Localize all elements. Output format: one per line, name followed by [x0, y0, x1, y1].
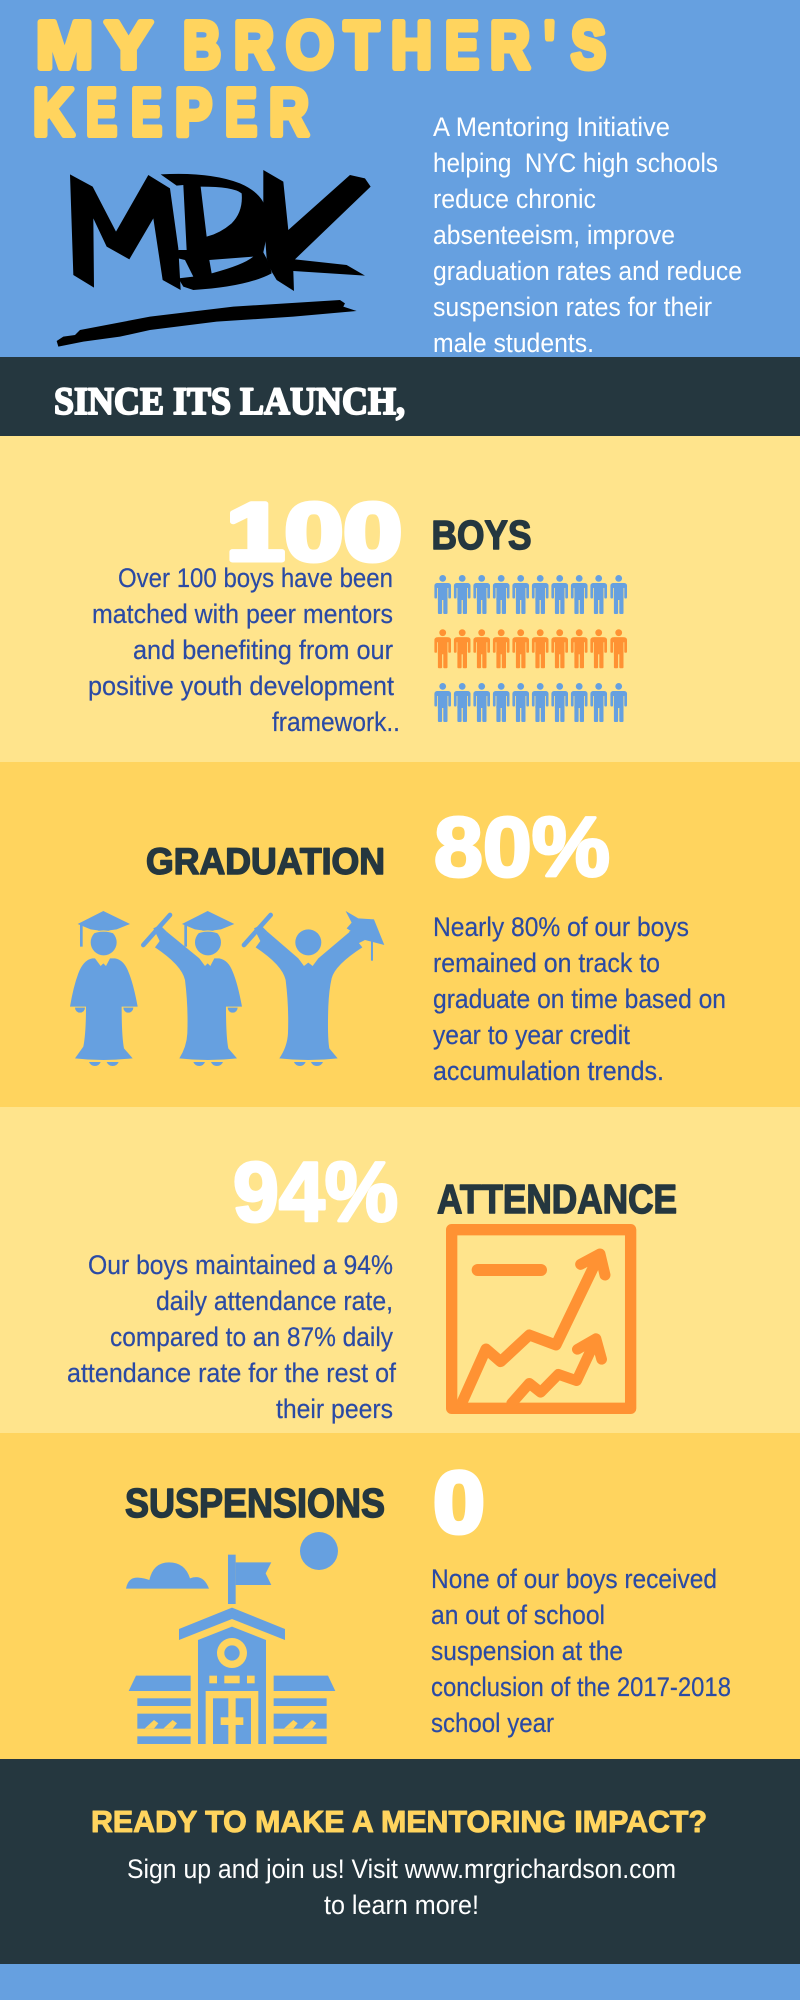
icon: growth chart — [452, 1230, 631, 1408]
text: attendance description: daily attendance rate, — [156, 1286, 393, 1316]
text: attendance description — [67, 1250, 396, 1424]
title: Y — [105, 8, 152, 83]
title: S — [571, 8, 606, 83]
intro text: suspension rates for their — [433, 292, 712, 322]
text: boys description: positive youth development — [88, 671, 394, 701]
title: O — [286, 8, 334, 83]
icon row: orange people — [434, 629, 627, 668]
heading: boys: BOYS — [432, 512, 532, 558]
intro text: graduation rates and reduce — [433, 256, 742, 286]
title: H — [391, 8, 432, 83]
intro text — [433, 112, 742, 358]
figure 2 — [143, 911, 242, 1066]
text: call to action: to learn more! — [324, 1890, 479, 1920]
text: attendance description: compared to an 87% daily — [110, 1322, 393, 1352]
intro text: male students. — [433, 328, 594, 358]
icon row: blue people — [434, 575, 627, 614]
text: boys description: and benefiting from our — [133, 635, 393, 665]
figure 1 — [70, 911, 138, 1066]
text: suspensions description — [431, 1564, 731, 1738]
text: attendance description: their peers — [276, 1394, 393, 1424]
title: P — [175, 75, 212, 150]
text: graduation description: remained on track to — [433, 948, 660, 978]
panel: suspensions — [0, 1433, 800, 1759]
icon: school with flag, cloud and sun — [126, 1532, 338, 1744]
title: T — [344, 8, 379, 83]
heading: since its launch: SINCE ITS LAUNCH, — [54, 380, 405, 423]
text: boys description — [88, 563, 400, 737]
text: suspensions description: None of our boys received — [431, 1564, 717, 1594]
footer band — [0, 1964, 800, 2000]
panel: boys — [0, 436, 800, 762]
number: 100: 100 — [226, 487, 402, 578]
heading: attendance: ATTENDANCE — [437, 1176, 677, 1222]
panel: header — [0, 0, 800, 358]
number: 0: 0 — [434, 1455, 484, 1551]
text: suspensions description: conclusion of the 2017-2018 — [431, 1672, 731, 1702]
text: attendance description: Our boys maintained a 94% — [88, 1250, 393, 1280]
text: graduation description: graduate on time based on — [433, 984, 726, 1014]
text: boys description: Over 100 boys have been — [118, 563, 393, 593]
title: R — [269, 75, 309, 150]
intro text: A Mentoring Initiative — [433, 112, 670, 142]
icon row: blue people second — [434, 683, 627, 722]
title: R — [234, 8, 274, 83]
intro text: reduce chronic — [433, 184, 596, 214]
number: 80%: 80% — [434, 800, 610, 894]
title: E — [131, 75, 162, 150]
text: graduation description: accumulation trends. — [433, 1056, 664, 1086]
heading: suspensions: SUSPENSIONS — [125, 1480, 385, 1526]
title: E — [86, 75, 117, 150]
text: boys description: matched with peer mentors — [92, 599, 393, 629]
panel: since its launch banner — [0, 357, 800, 436]
text: suspensions description: an out of school — [431, 1600, 605, 1630]
text: suspensions description: suspension at the — [431, 1636, 623, 1666]
panel: call to action — [0, 1759, 800, 1964]
heading: graduation: GRADUATION — [146, 841, 385, 882]
text: call to action: Sign up and join us! Visit www.mrgrichardson.com — [127, 1854, 676, 1884]
title: E — [445, 8, 479, 83]
title: M — [36, 8, 93, 83]
title: B — [183, 8, 221, 83]
text: call to action — [127, 1854, 676, 1920]
text: graduation description: year to year credit — [433, 1020, 630, 1050]
title — [33, 8, 606, 150]
panel: graduation — [0, 762, 800, 1107]
title: R — [490, 8, 530, 83]
title: K — [33, 75, 74, 150]
figure 3 — [244, 911, 384, 1066]
panel: attendance — [0, 1107, 800, 1433]
text: attendance description: attendance rate for the rest of — [67, 1358, 396, 1388]
intro text: absenteeism, improve — [433, 220, 675, 250]
text: graduation description — [433, 912, 726, 1086]
heading: ready to make a mentoring impact: READY TO MAKE A MENTORING IMPACT? — [91, 1805, 707, 1839]
text: boys description: framework.. — [272, 707, 400, 737]
icon: MBK logo — [57, 170, 371, 347]
title: ' — [544, 8, 555, 83]
intro text: helping NYC high schools — [433, 148, 718, 178]
text: graduation description: Nearly 80% of our boys — [433, 912, 689, 942]
title: E — [225, 75, 257, 150]
icon: graduates — [70, 911, 384, 1066]
text: suspensions description: school year — [431, 1708, 554, 1738]
number: 94%: 94% — [233, 1145, 398, 1239]
